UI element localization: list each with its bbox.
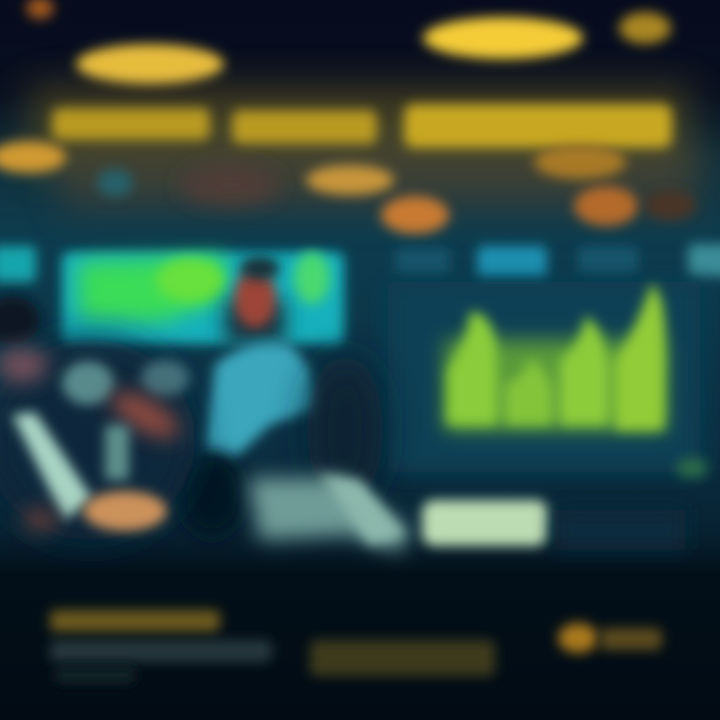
panel: right chart [388, 282, 700, 472]
bar chart [447, 283, 665, 430]
ambient glow behind headings [30, 85, 700, 210]
ceiling lamps [26, 0, 671, 84]
forearm [104, 382, 186, 448]
bar chart glow [445, 340, 665, 430]
dark shoulder [307, 355, 383, 505]
face [0, 347, 48, 383]
torso [205, 342, 314, 458]
pale sleeve [12, 412, 92, 520]
title band [52, 104, 672, 148]
hand [83, 491, 167, 531]
head [234, 268, 276, 328]
lower body [180, 453, 244, 537]
footer text: center [310, 640, 495, 676]
footer text: left [50, 610, 272, 682]
desk items [248, 475, 685, 552]
small green marker [676, 458, 708, 478]
tab chips [0, 244, 720, 282]
panel: left screen [62, 252, 344, 344]
equipment [62, 361, 114, 405]
person: central figure [180, 256, 383, 537]
hair [0, 296, 40, 344]
footer text: right [558, 623, 662, 653]
person: left figure [0, 296, 195, 540]
subtitle highlights [0, 141, 696, 234]
chart glow on left screen [78, 252, 330, 322]
